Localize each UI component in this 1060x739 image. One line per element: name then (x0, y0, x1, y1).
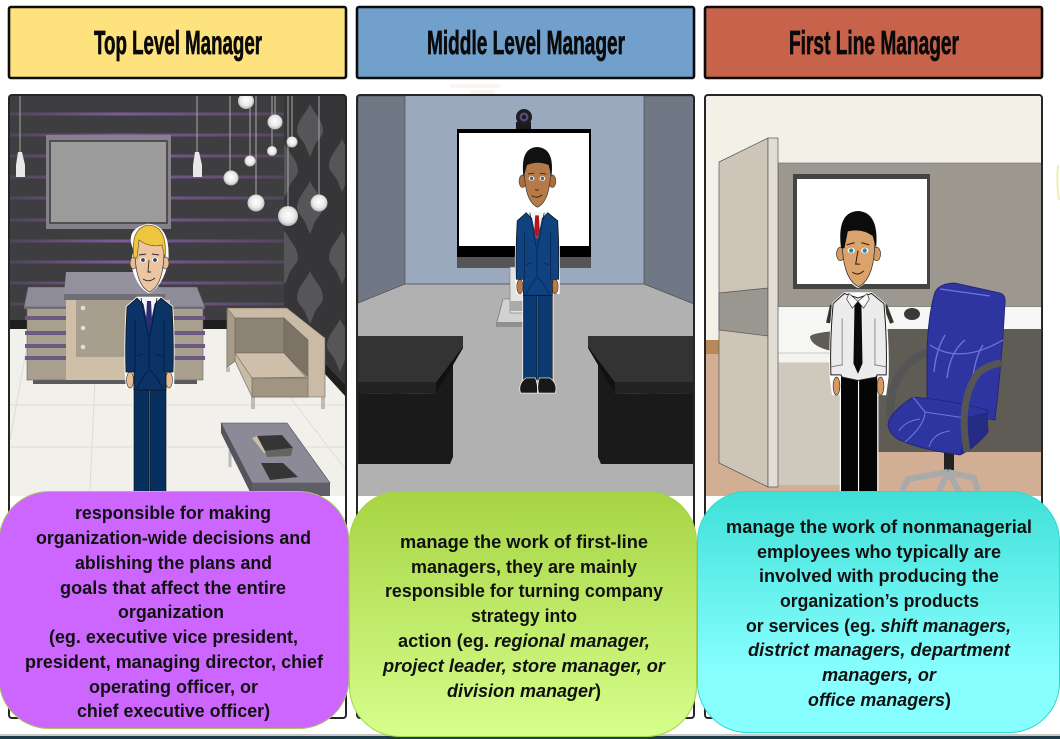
callout: top level manager description: responsible for making (75, 503, 271, 523)
bottom strip (0, 734, 1060, 739)
callout: first line manager description: manage the work of nonmanagerial (726, 517, 1032, 537)
header: First Line Manager (705, 7, 1042, 78)
panel: executive lobby scene (10, 93, 355, 496)
character: first line manager in white shirt (831, 211, 888, 517)
callout: top level manager description: president, managing director, chief (25, 652, 324, 672)
panel: office cubicle scene (706, 96, 1042, 517)
callout: middle level manager description: project leader, store manager, or (382, 656, 666, 676)
left desk (358, 336, 463, 464)
webcam (516, 109, 532, 130)
callout: first line manager description: office managers) (808, 690, 951, 710)
callout: top level manager description: goals that affect the entire (60, 578, 286, 598)
coffee table (221, 423, 330, 496)
callout: middle level manager description: strategy into (471, 606, 577, 626)
callout: first line manager description: employees who typically are (757, 542, 1001, 562)
character: manager in blue suit and red tie (516, 147, 559, 393)
callout: top level manager description: (eg. executive vice president, (49, 627, 298, 647)
panel: meeting room scene (358, 96, 694, 496)
callout: top level manager description (0, 492, 349, 728)
callout: middle level manager description: manage the work of first-line (400, 532, 648, 552)
callout: middle level manager description: action (eg. regional manager, (398, 631, 650, 651)
callout: first line manager description: organization’s products (780, 591, 979, 611)
callout: middle level manager description: managers, they are mainly (411, 557, 637, 577)
right desk (588, 336, 694, 464)
projector on table (496, 266, 522, 327)
callout: top level manager description: chief executive officer) (77, 701, 270, 721)
callout: top level manager description: organization (118, 602, 224, 622)
office chair (888, 283, 1005, 496)
callout: first line manager description: district managers, department (748, 640, 1011, 660)
header: Top Level Manager: Top Level Manager (94, 24, 262, 61)
sofa (227, 308, 325, 409)
reception desk (24, 272, 205, 384)
callout: first line manager description: or services (eg. shift managers, (746, 616, 1011, 636)
callout: middle level manager description (350, 492, 696, 736)
character: blond manager in navy suit (126, 225, 173, 496)
callout: top level manager description: operating officer, or (89, 677, 258, 697)
callout: top level manager description: ablishing the plans and (75, 553, 272, 573)
open door (719, 138, 778, 487)
header: Top Level Manager (9, 7, 346, 78)
callout: middle level manager description: division manager) (447, 681, 601, 701)
header: Middle Level Manager (357, 7, 694, 78)
callout: first line manager description: managers, or (822, 665, 937, 685)
callout: first line manager description (698, 492, 1060, 732)
header: Middle Level Manager: Middle Level Manager (427, 24, 625, 61)
callout: middle level manager description: responsible for turning company (385, 581, 663, 601)
wall screen (457, 129, 591, 268)
callout: first line manager description: involved with producing the (759, 566, 999, 586)
decorative faint background (450, 86, 1059, 200)
desk and cabinet (778, 305, 1042, 496)
callout: top level manager description: organization-wide decisions and (36, 528, 311, 548)
